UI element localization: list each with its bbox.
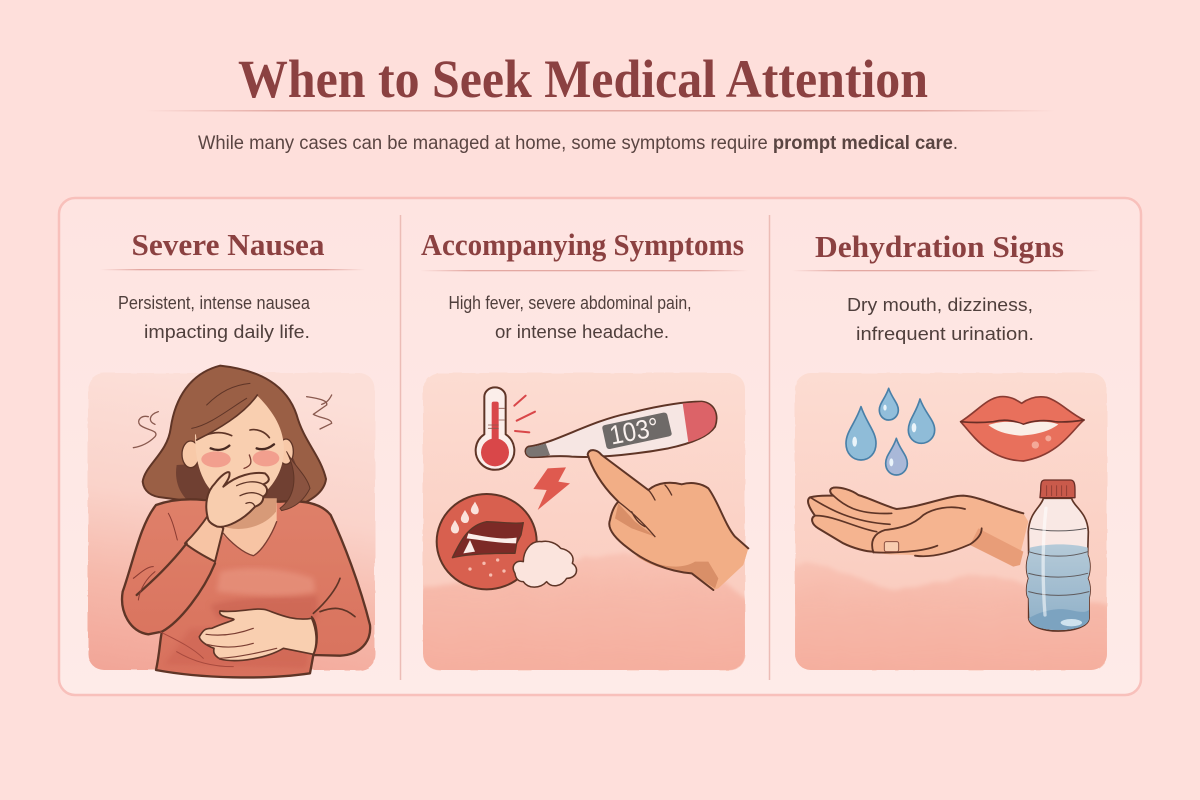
hand on mouth: [206, 472, 269, 527]
icon: open hand: [808, 487, 1028, 567]
subtitle: While many cases can be managed at home, some symptoms require prompt medical care.: [198, 133, 958, 154]
description: High fever, severe abdominal pain,: [448, 292, 692, 313]
description: or intense headache.: [495, 321, 669, 342]
icon: mouth circle: [437, 494, 537, 589]
title rule: [145, 110, 1055, 112]
icon: digital thermometer: 103°: [607, 412, 661, 451]
face: [195, 395, 284, 498]
arm seam marks: [137, 543, 215, 632]
main card: [59, 198, 1141, 695]
heading: dehydration signs: Dehydration Signs: [815, 229, 1064, 264]
title: When to Seek Medical Attention: [238, 49, 928, 109]
description: Persistent, intense nausea: [118, 292, 311, 313]
illustration: woman covering mouth: [88, 366, 375, 677]
icon: pointing hand: [588, 450, 748, 590]
illustration: fever and symptoms: [420, 373, 750, 680]
heat rays: [514, 396, 535, 432]
dizziness marks: [133, 412, 158, 448]
illustration: dehydration signs: [790, 373, 1110, 680]
hand on stomach: [199, 609, 316, 661]
icon: lightning bolt: [533, 467, 570, 510]
panel: severe nausea: [88, 227, 375, 677]
sweater: [122, 499, 370, 677]
icon: dry lips: [961, 397, 1084, 461]
heading rule: [792, 270, 1100, 271]
panel: accompanying symptoms: [420, 227, 750, 680]
heading: severe nausea: Severe Nausea: [132, 227, 325, 262]
description: [448, 292, 692, 342]
heading: accompanying symptoms: Accompanying Symptoms: [421, 227, 744, 262]
icon: water drops: [846, 388, 935, 475]
ear left and right: [182, 441, 199, 468]
icon: small thermometer: [476, 387, 514, 470]
heading rule: [420, 270, 748, 271]
neck and chest: [213, 498, 277, 556]
arm raised to mouth: [185, 515, 223, 562]
hair front: [196, 375, 257, 440]
description: [118, 292, 311, 342]
description: impacting daily life.: [144, 321, 310, 342]
icon: water bottle: [1027, 480, 1090, 631]
hair back: [143, 366, 326, 511]
panel: dehydration signs: [790, 229, 1110, 680]
icon: digital thermometer: [526, 402, 716, 457]
column dividers: [400, 215, 770, 680]
description: infrequent urination.: [856, 323, 1034, 344]
icon: white cloud: [513, 541, 577, 587]
description: Dry mouth, dizziness,: [847, 294, 1033, 315]
heading rule: [100, 269, 365, 270]
description: [847, 294, 1034, 344]
